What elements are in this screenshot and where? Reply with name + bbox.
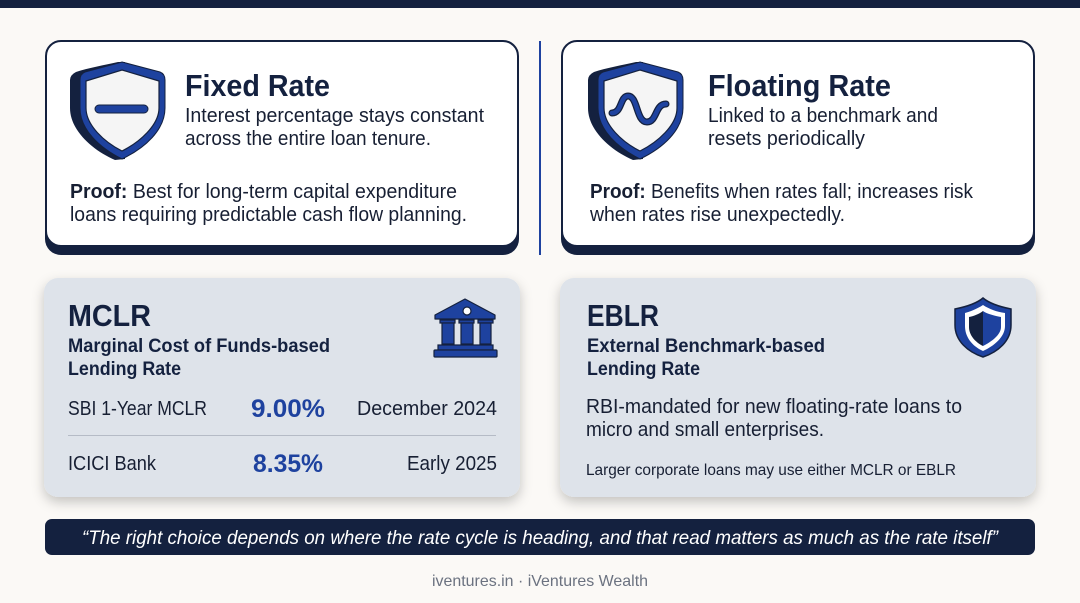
panel: floating rate <box>561 41 1035 255</box>
row: ICICI <box>68 450 497 478</box>
heading: floating rate: Floating Rate <box>708 68 891 103</box>
description: fixed rate <box>185 105 484 150</box>
description: floating rate <box>708 105 938 150</box>
proof: fixed rate: Proof: Best for long-term capital expenditure <box>70 181 457 203</box>
subheading: MCLR <box>68 336 330 380</box>
divider <box>539 41 541 255</box>
icon: half shield <box>955 298 1011 357</box>
top bar <box>0 0 1080 8</box>
proof: fixed rate <box>70 181 467 226</box>
description: floating rate: Linked to a benchmark and <box>708 105 938 127</box>
row: SBI <box>68 395 497 423</box>
footer: iventures.in · iVentures Wealth <box>432 573 648 590</box>
proof: floating rate: when rates rise unexpectedly. <box>589 204 845 226</box>
subheading: EBLR: External Benchmark-based <box>587 336 825 357</box>
row: ICICI: ICICI Bank <box>68 453 157 475</box>
proof: floating rate <box>589 181 974 226</box>
icon: shield with minus <box>70 62 165 160</box>
heading: fixed rate: Fixed Rate <box>185 68 330 103</box>
row: ICICI: 8.35% <box>253 450 323 478</box>
note: EBLR: Larger corporate loans may use either MCLR or EBLR <box>586 462 956 479</box>
description: floating rate: resets periodically <box>708 128 865 150</box>
description: EBLR: micro and small enterprises. <box>586 419 824 441</box>
subheading: EBLR <box>587 336 825 380</box>
row: ICICI: Early 2025 <box>407 453 497 475</box>
proof: fixed rate: loans requiring predictable cash flow planning. <box>70 204 467 226</box>
panel: EBLR <box>560 278 1036 497</box>
subheading: EBLR: Lending Rate <box>587 359 700 380</box>
heading: MCLR: MCLR <box>68 298 151 333</box>
row: SBI: SBI 1-Year MCLR <box>68 398 207 420</box>
row: SBI: 9.00% <box>251 395 325 423</box>
description: fixed rate: across the entire loan tenure. <box>185 128 431 150</box>
icon: bank <box>434 299 497 357</box>
icon: shield with wave <box>588 62 683 160</box>
panel: fixed rate <box>45 41 519 255</box>
subheading: MCLR: Marginal Cost of Funds-based <box>68 336 330 357</box>
description: EBLR: RBI-mandated for new floating-rate loans to <box>586 396 962 418</box>
panel: MCLR <box>44 278 520 497</box>
row: SBI: December 2024 <box>357 398 497 420</box>
proof: floating rate: Proof: Benefits when rates fall; increases risk <box>590 181 974 203</box>
subheading: MCLR: Lending Rate <box>68 359 181 380</box>
description: EBLR <box>586 396 962 441</box>
quote banner: “The right choice depends on where the rate cycle is heading, and that read matters as much as the rate itself” <box>82 528 1000 549</box>
description: fixed rate: Interest percentage stays constant <box>185 105 484 127</box>
quote banner <box>45 519 1035 555</box>
heading: EBLR: EBLR <box>587 298 659 333</box>
